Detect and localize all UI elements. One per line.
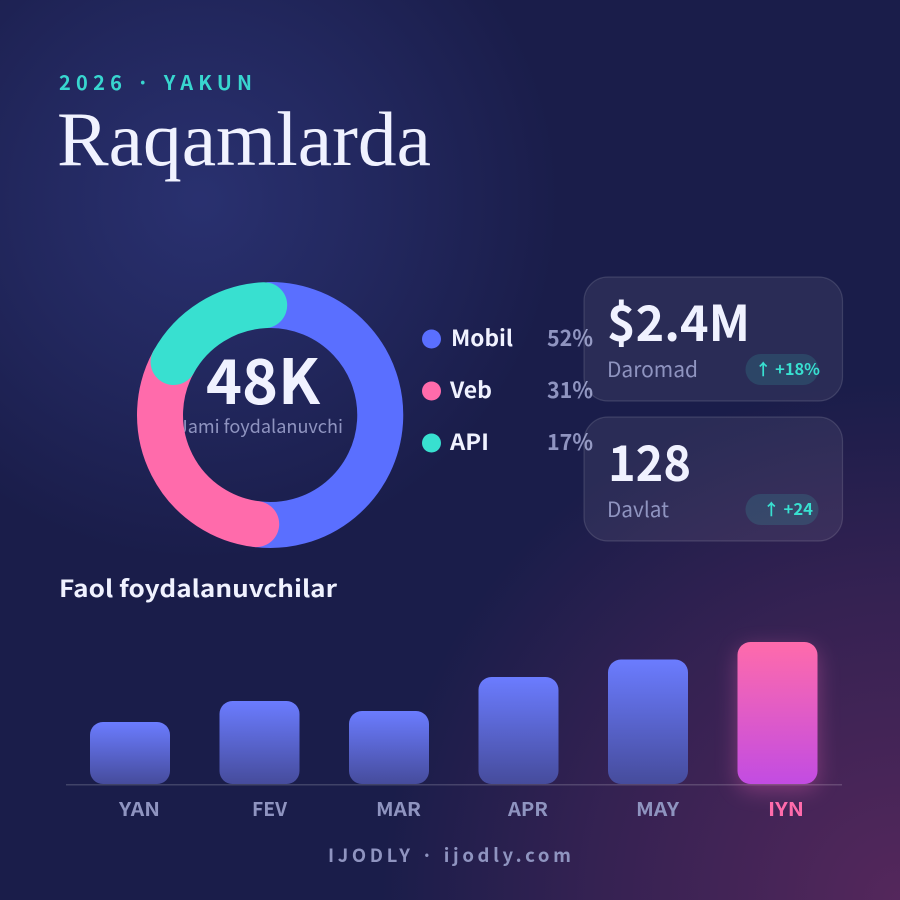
bar: MAY xyxy=(608,660,688,784)
badge: ↑ +24 xyxy=(763,496,813,520)
bar: YAN xyxy=(90,722,170,784)
title: Raqamlarda xyxy=(57,96,431,182)
month label: MAY xyxy=(636,795,680,822)
badge: ↑ +18% xyxy=(755,356,820,380)
badge xyxy=(746,494,818,525)
axis line xyxy=(66,784,842,786)
donut chart xyxy=(160,305,380,525)
legend: Veb: 31% xyxy=(547,373,593,405)
chart heading: Faol foydalanuvchilar xyxy=(59,570,338,604)
eyebrow: 2026 · YAKUN xyxy=(59,67,252,96)
card label: Davlat xyxy=(607,494,669,524)
month label: APR xyxy=(507,795,548,822)
legend: Veb: Veb xyxy=(449,373,492,405)
bar glow: IYN xyxy=(738,648,818,790)
month label: FEV xyxy=(252,795,287,822)
legend: API xyxy=(422,425,593,457)
bar: IYN xyxy=(738,642,818,784)
legend: API: API xyxy=(449,425,489,457)
bar: FEV xyxy=(220,701,300,784)
badge xyxy=(746,354,820,385)
card: Davlat xyxy=(584,417,842,541)
card label: Daromad xyxy=(607,354,698,384)
month label: YAN xyxy=(118,795,160,822)
footer: IJODLY · ijodly.com xyxy=(328,842,571,868)
month label: IYN xyxy=(768,795,804,822)
segment: Veb 31% xyxy=(160,362,256,524)
legend xyxy=(422,321,593,457)
card value: $2.4M xyxy=(607,285,750,356)
bar: MAR xyxy=(349,711,429,784)
segment: Mobil 52% xyxy=(256,305,380,525)
legend: Mobil: 52% xyxy=(547,321,593,353)
legend: Mobil xyxy=(422,321,593,353)
segment: API 17% xyxy=(174,305,264,362)
donut center label: Jami foydalanuvchi xyxy=(178,413,343,439)
legend: Mobil: Mobil xyxy=(451,321,513,353)
bar chart xyxy=(66,642,842,822)
legend: API: 17% xyxy=(547,425,593,457)
bar: APR xyxy=(478,677,558,784)
card value: 128 xyxy=(608,425,691,496)
legend: Veb xyxy=(422,373,593,405)
card: Daromad xyxy=(584,277,842,401)
donut center value: 48K xyxy=(206,332,320,422)
month label: MAR xyxy=(376,795,421,822)
